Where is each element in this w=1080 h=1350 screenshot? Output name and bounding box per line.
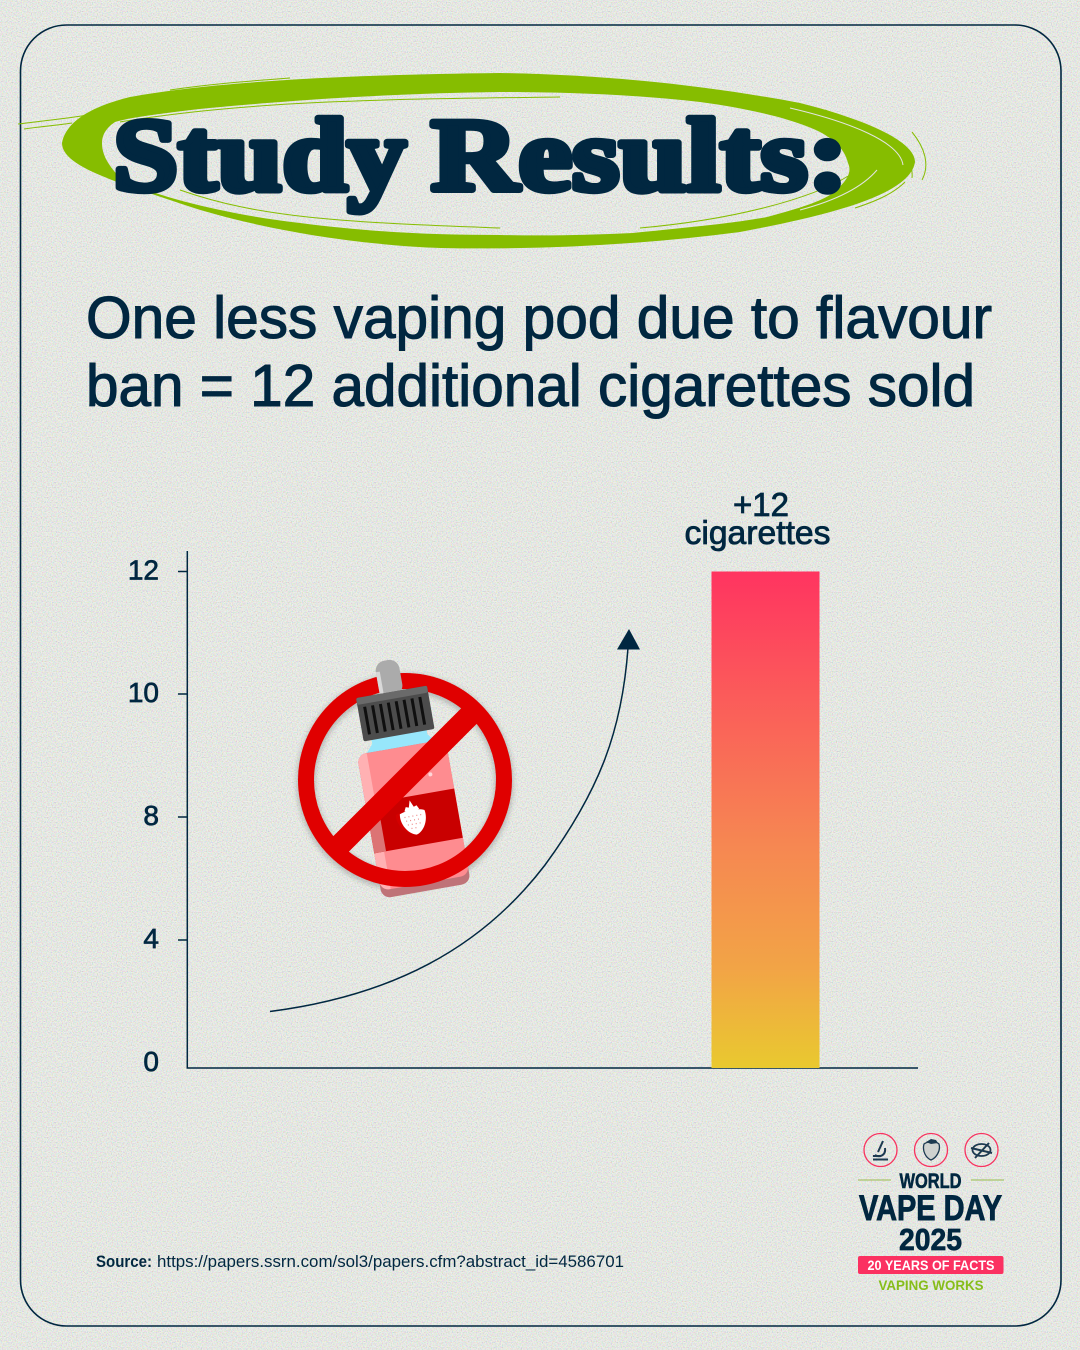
y axis labels: 12 [128, 554, 159, 586]
dropper cap [350, 654, 435, 741]
bar label: cigarettes [684, 514, 830, 551]
headline: One less vaping pod due to flavour [86, 285, 992, 351]
logo text: 2025 [899, 1222, 962, 1257]
logo text [859, 1170, 1002, 1257]
logo text: WORLD [900, 1170, 962, 1193]
icon: banned strawberry vape bottle [306, 654, 504, 899]
badge: 20 YEARS OF FACTS [868, 1257, 994, 1273]
headline [86, 285, 992, 419]
title with brush ellipse [18, 73, 926, 248]
bar chart [128, 486, 918, 1077]
title text: Results: [431, 98, 848, 213]
bar label [684, 486, 830, 551]
headline: ban = 12 additional cigarettes sold [86, 353, 975, 419]
prohibition sign [306, 681, 504, 879]
bottle body [354, 723, 471, 899]
logo text: VAPE DAY [859, 1189, 1002, 1228]
icon: strawberry [914, 1134, 948, 1166]
title text: Study [113, 98, 406, 213]
icon: microscope [864, 1134, 897, 1166]
y axis labels [128, 554, 159, 1077]
bar label: +12 [733, 486, 789, 523]
title text [113, 98, 848, 213]
logo rules [858, 1179, 1004, 1181]
y axis labels: 0 [143, 1046, 159, 1077]
arrow: upward trend [270, 629, 640, 1012]
icon: crossed cigarette [965, 1134, 998, 1166]
strawberry [394, 798, 430, 838]
y axis labels: 8 [143, 800, 159, 831]
axes [178, 551, 918, 1068]
source: Source: [96, 1253, 152, 1271]
logo: World Vape Day 2025 [858, 1134, 1004, 1293]
tagline: VAPING WORKS [878, 1277, 984, 1293]
bar: +12 cigarettes [712, 572, 820, 1068]
y axis labels: 10 [128, 677, 159, 708]
source: https://papers.ssrn.com/sol3/papers.cfm?abstract_id=4586701 [157, 1253, 624, 1271]
y axis labels: 4 [143, 923, 159, 954]
brush ellipse [18, 73, 926, 248]
